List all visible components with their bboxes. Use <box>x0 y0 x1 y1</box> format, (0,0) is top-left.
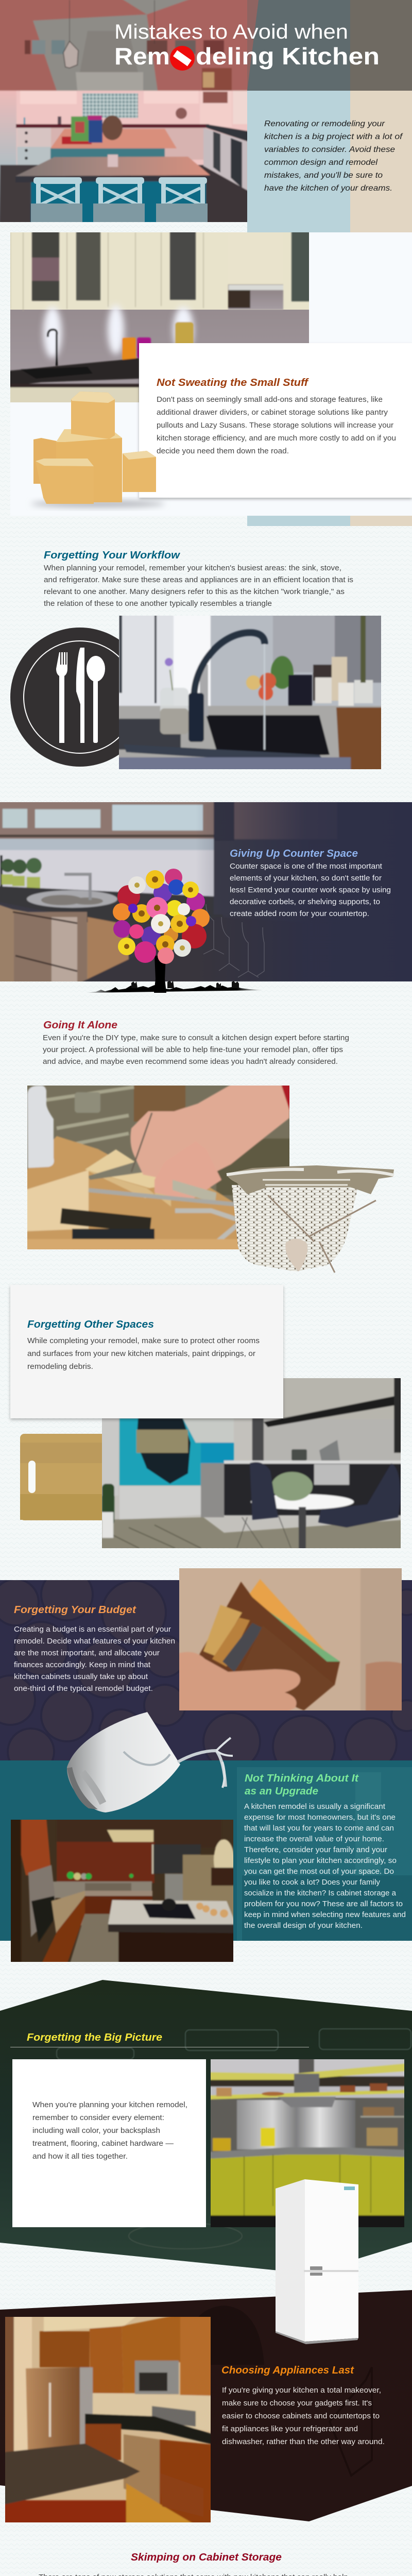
body text: fit appliances like your refrigerator and <box>222 2425 358 2433</box>
heading: Forgetting Your Budget <box>14 1604 136 1616</box>
icon: cardboard boxes <box>31 392 165 507</box>
body text: treatment, flooring, cabinet hardware — <box>32 2139 174 2148</box>
body text: When planning your remodel, remember your kitchen's busiest areas: the sink, stove, <box>44 564 341 572</box>
body text: less! Extend your counter work space by using <box>230 886 391 894</box>
body text: are the most important, and allocate your <box>14 1649 160 1657</box>
body text: Even if you're the DIY type, make sure to consult a kitchen design expert before starting <box>43 1033 349 1042</box>
panel: going it alone <box>25 1020 394 1273</box>
body text: A kitchen remodel is usually a significant <box>244 1803 385 1811</box>
body text <box>157 395 396 455</box>
heading: as an Upgrade <box>245 1786 318 1797</box>
body text: one-third of the typical remodel budget. <box>14 1684 153 1693</box>
white text card <box>139 343 412 498</box>
title: Rem <box>114 43 170 70</box>
panel: forgetting the big picture <box>0 1980 412 2274</box>
heading: Forgetting Other Spaces <box>27 1319 154 1330</box>
panel: forgetting your workflow <box>10 550 384 772</box>
heading: Giving Up Counter Space <box>230 848 358 859</box>
body text: you like to cook a lot? Does your family <box>244 1878 381 1887</box>
body text: remodeling debris. <box>27 1362 93 1371</box>
body text <box>32 2100 187 2161</box>
title <box>114 21 380 70</box>
panel: not thinking about it as an upgrade <box>0 1760 412 1964</box>
photo: yellow-green kitchen <box>211 2059 404 2227</box>
body text: While completing your remodel, make sure to protect other rooms <box>27 1336 260 1345</box>
panel: forgetting your budget <box>0 1566 412 1777</box>
body text: dishwasher, rather than the other way around. <box>222 2437 385 2446</box>
body text: elements of your kitchen, so don't settle for <box>230 874 382 883</box>
icon: stool centre <box>93 177 145 222</box>
body text: finances accordingly. Keep in mind that <box>14 1660 151 1669</box>
intro text: kitchen is a big project with a lot of <box>264 132 403 141</box>
intro text: have the kitchen of your dreams. <box>264 184 392 193</box>
white text card <box>12 2059 206 2227</box>
photo: wood cabinets and steel fridge <box>5 2317 211 2522</box>
photo: steel kitchen with navy overlay <box>0 802 412 981</box>
body text <box>43 1033 349 1066</box>
panel: hero header <box>0 0 412 232</box>
photo: leather wallet in hand <box>179 1568 402 1710</box>
photo: dark modern kitchen <box>11 1820 233 1962</box>
icon: stool left <box>31 177 82 222</box>
intro text: variables to consider. Avoid these <box>264 145 395 154</box>
photo: modern kitchen <box>102 1378 401 1548</box>
body text: remodel. Decide what features of your kitchen <box>14 1637 175 1646</box>
body text: and how it all ties together. <box>32 2152 128 2161</box>
body text: expense for most homeowners, but it's one <box>244 1814 396 1822</box>
icon: plate with cutlery <box>10 628 149 767</box>
body text: Counter space is one of the most important <box>230 862 383 871</box>
photo: kitchen with island <box>0 0 247 222</box>
title: Mistakes to Avoid when <box>114 21 348 43</box>
body text: easier to choose cabinets and countertops to <box>222 2412 380 2420</box>
body text: you can get the most out of your space. Do <box>244 1868 394 1876</box>
body text: Therefore, consider your family and your <box>244 1846 387 1854</box>
body text: keep in mind when selecting new features and <box>244 1911 406 1919</box>
body text: create added room for your countertop. <box>230 909 369 918</box>
panel: choosing appliances last <box>0 2290 412 2525</box>
icon: tipping water glass <box>67 1712 233 1812</box>
body text: and advice, and maybe even recommend some ideas you hadn't already considered. <box>43 1057 338 1066</box>
heading: Not Sweating the Small Stuff <box>157 377 310 388</box>
icon: white refrigerator <box>276 2179 358 2344</box>
body text <box>230 862 391 918</box>
body text: kitchen storage efficiency, and are much more costly to add on if you <box>157 434 396 443</box>
icon: wicker basket <box>227 1165 394 1273</box>
photo: hands measuring wood <box>27 1086 289 1249</box>
icon: flower tree <box>85 869 264 993</box>
body text: the overall design of your kitchen. <box>244 1922 363 1930</box>
body text: remember to consider every element: <box>32 2113 164 2122</box>
panel: forgetting other spaces <box>10 1285 403 1551</box>
body text: If you're giving your kitchen a total makeover, <box>222 2386 381 2395</box>
body text: lifestyle to plan your kitchen accordingly, so <box>244 1857 397 1865</box>
body text: additional drawer dividers, or cabinet storage solutions like pantry <box>157 408 388 417</box>
panel: giving up counter space <box>0 800 412 993</box>
body text: and refrigerator. Make sure these areas and appliances are in an efficient location that is <box>44 575 353 584</box>
icon: no-entry sign <box>170 46 195 71</box>
body text: When you're planning your kitchen remodel, <box>32 2100 187 2109</box>
body text <box>222 2386 385 2446</box>
body text: problem for you now? These are all factors to <box>244 1900 403 1908</box>
body text: decorative corbels, or shelving supports, to <box>230 897 380 906</box>
heading: Not Thinking About It <box>245 1773 359 1784</box>
body text: that will last you for years to come and can <box>244 1824 394 1833</box>
body text: pullouts and Lazy Susans. These storage solutions will increase your <box>157 421 393 430</box>
panel: skimping on cabinet storage <box>11 2552 407 2576</box>
body text <box>14 1625 175 1693</box>
body text: Don't pass on seemingly small add-ons and storage features, like <box>157 395 383 404</box>
heading: Forgetting Your Workflow <box>44 550 181 561</box>
body text: your project. A professional will be able to help fine-tune your remodel plan, offer tips <box>43 1045 343 1054</box>
icon: stool right <box>156 177 208 222</box>
intro text: Renovating or remodeling your <box>264 120 385 128</box>
body text: decide you need them down the road. <box>157 447 289 455</box>
body text: make sure to choose your gadgets first. It's <box>222 2399 372 2408</box>
body text: kitchen cabinets usually take up about <box>14 1672 148 1681</box>
heading: Forgetting the Big Picture <box>27 2032 162 2043</box>
decorative colour bars <box>247 516 412 526</box>
body text: the relation of these to one another typically resembles a triangle <box>44 599 272 608</box>
body text: and surfaces from your new kitchen materials, paint drippings, or <box>27 1349 255 1358</box>
panel: not sweating the small stuff <box>8 230 412 516</box>
photo: cream cabinets and sink <box>10 232 309 402</box>
heading <box>245 1773 359 1797</box>
title: deling Kitchen <box>196 43 380 70</box>
photo: faucet at sink <box>119 616 381 769</box>
body text: increase the overall value of your home. <box>244 1835 384 1843</box>
body text <box>244 1803 406 1930</box>
body text: including wall color, your backsplash <box>32 2126 160 2135</box>
heading: Skimping on Cabinet Storage <box>131 2552 282 2563</box>
body text <box>27 1336 260 1371</box>
body text: Creating a budget is an essential part of your <box>14 1625 171 1634</box>
text card <box>10 1285 283 1418</box>
icon: cutting board <box>20 1434 123 1520</box>
intro text <box>264 120 403 193</box>
body text: socialize in the kitchen? Is cabinet storage a <box>244 1889 397 1897</box>
intro text: common design and remodel <box>264 158 377 167</box>
heading: Going It Alone <box>43 1020 117 1031</box>
body text <box>44 564 353 608</box>
heading: Choosing Appliances Last <box>221 2365 354 2376</box>
body text: relevant to one another. Many designers refer to this as the kitchen "work triangle," as <box>44 587 345 596</box>
intro text: mistakes, and you'll be sure to <box>264 171 383 180</box>
